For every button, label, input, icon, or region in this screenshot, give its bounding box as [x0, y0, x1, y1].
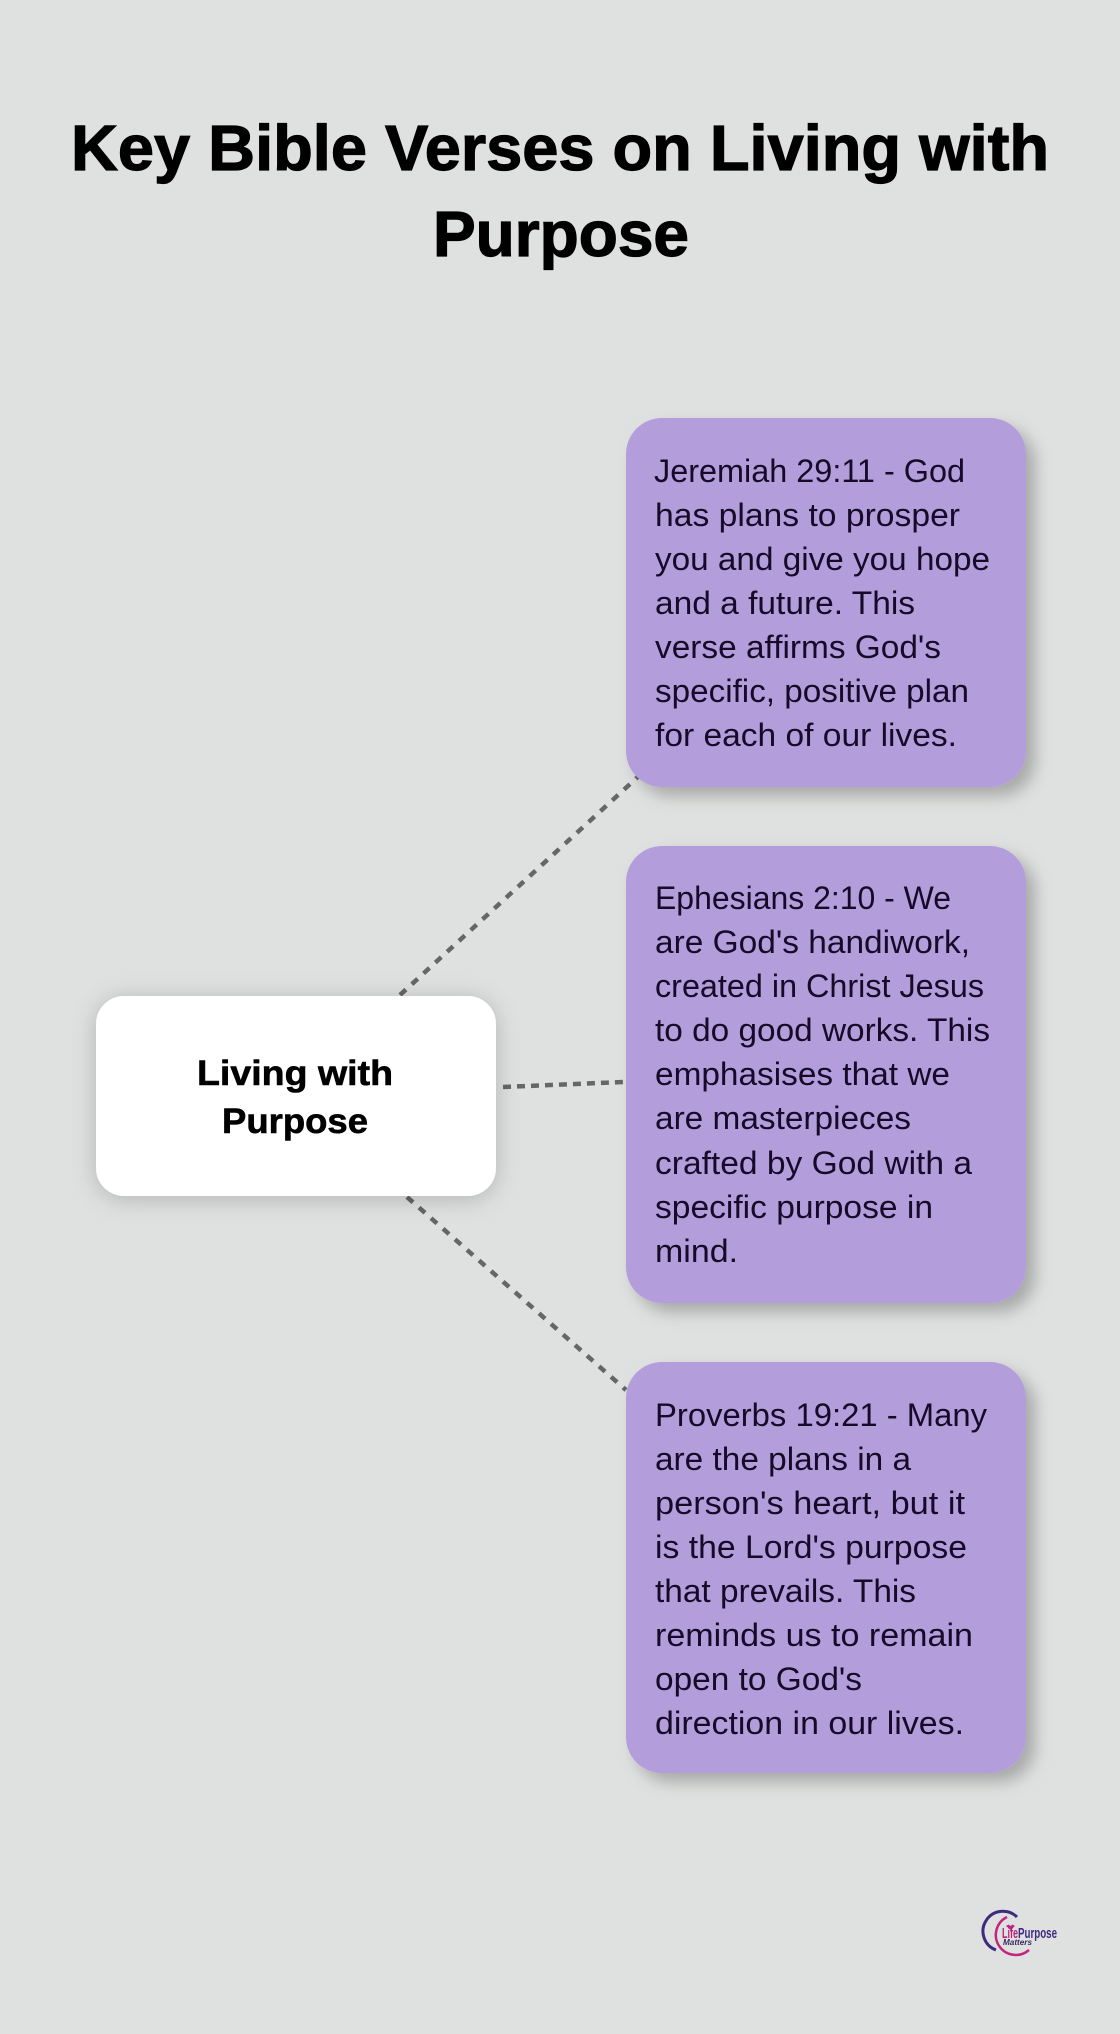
logo: Life Purpose Matters: Life	[1002, 1925, 1018, 1942]
panel: Living with Purpose: Purpose	[222, 1102, 368, 1141]
title: Key Bible Verses on Living with	[71, 112, 1049, 184]
title	[71, 112, 1049, 270]
panel: Jeremiah 29:11: for each of our lives.	[655, 717, 957, 753]
panel: Living with Purpose	[96, 996, 496, 1196]
panel: Proverbs 19:21: that prevails. This	[655, 1573, 916, 1609]
panel: Ephesians 2:10: crafted by God with a	[655, 1145, 972, 1181]
panel: Living with Purpose: Living with	[197, 1054, 393, 1093]
panel: Ephesians 2:10	[626, 846, 1026, 1303]
arrow: connector to Jeremiah box	[400, 774, 641, 995]
panel: Proverbs 19:21	[626, 1362, 1026, 1773]
panel: Proverbs 19:21: Proverbs 19:21 - Many	[655, 1397, 987, 1433]
logo: Life Purpose Matters: Matters	[1003, 1938, 1033, 1947]
title: Purpose	[433, 198, 689, 270]
panel: Jeremiah 29:11: has plans to prosper	[655, 497, 960, 533]
panel: Proverbs 19:21: are the plans in a	[655, 1441, 911, 1477]
panel: Jeremiah 29:11: Jeremiah 29:11 - God	[654, 453, 965, 489]
panel: Jeremiah 29:11: verse affirms God's	[655, 629, 941, 665]
panel: Jeremiah 29:11	[626, 418, 1026, 787]
arrow: connector to Proverbs box	[407, 1197, 626, 1390]
panel: Proverbs 19:21: reminds us to remain	[655, 1617, 973, 1653]
panel: Proverbs 19:21: is the Lord's purpose	[655, 1529, 967, 1565]
panel: Ephesians 2:10: to do good works. This	[655, 1012, 990, 1048]
panel: Ephesians 2:10: Ephesians 2:10 - We	[655, 880, 951, 916]
panel: Jeremiah 29:11: specific, positive plan	[655, 673, 969, 709]
logo: Life Purpose Matters: Purpose	[1018, 1925, 1057, 1942]
panel: Ephesians 2:10: specific purpose in	[655, 1189, 933, 1225]
panel: Ephesians 2:10: mind.	[655, 1233, 738, 1269]
panel: Ephesians 2:10: emphasises that we	[655, 1056, 950, 1092]
panel: Ephesians 2:10: are masterpieces	[655, 1100, 911, 1136]
panel: Proverbs 19:21: direction in our lives.	[655, 1705, 964, 1741]
panel: Proverbs 19:21: open to God's	[655, 1661, 862, 1697]
panel: Proverbs 19:21: person's heart, but it	[655, 1485, 965, 1521]
panel: Jeremiah 29:11: and a future. This	[655, 585, 915, 621]
panel: Jeremiah 29:11: you and give you hope	[655, 541, 990, 577]
arrow: connector to Ephesians box	[503, 1082, 623, 1087]
panel: Ephesians 2:10: created in Christ Jesus	[655, 968, 984, 1004]
logo: Life Purpose Matters	[983, 1911, 1057, 1955]
panel: Ephesians 2:10: are God's handiwork,	[655, 924, 970, 960]
